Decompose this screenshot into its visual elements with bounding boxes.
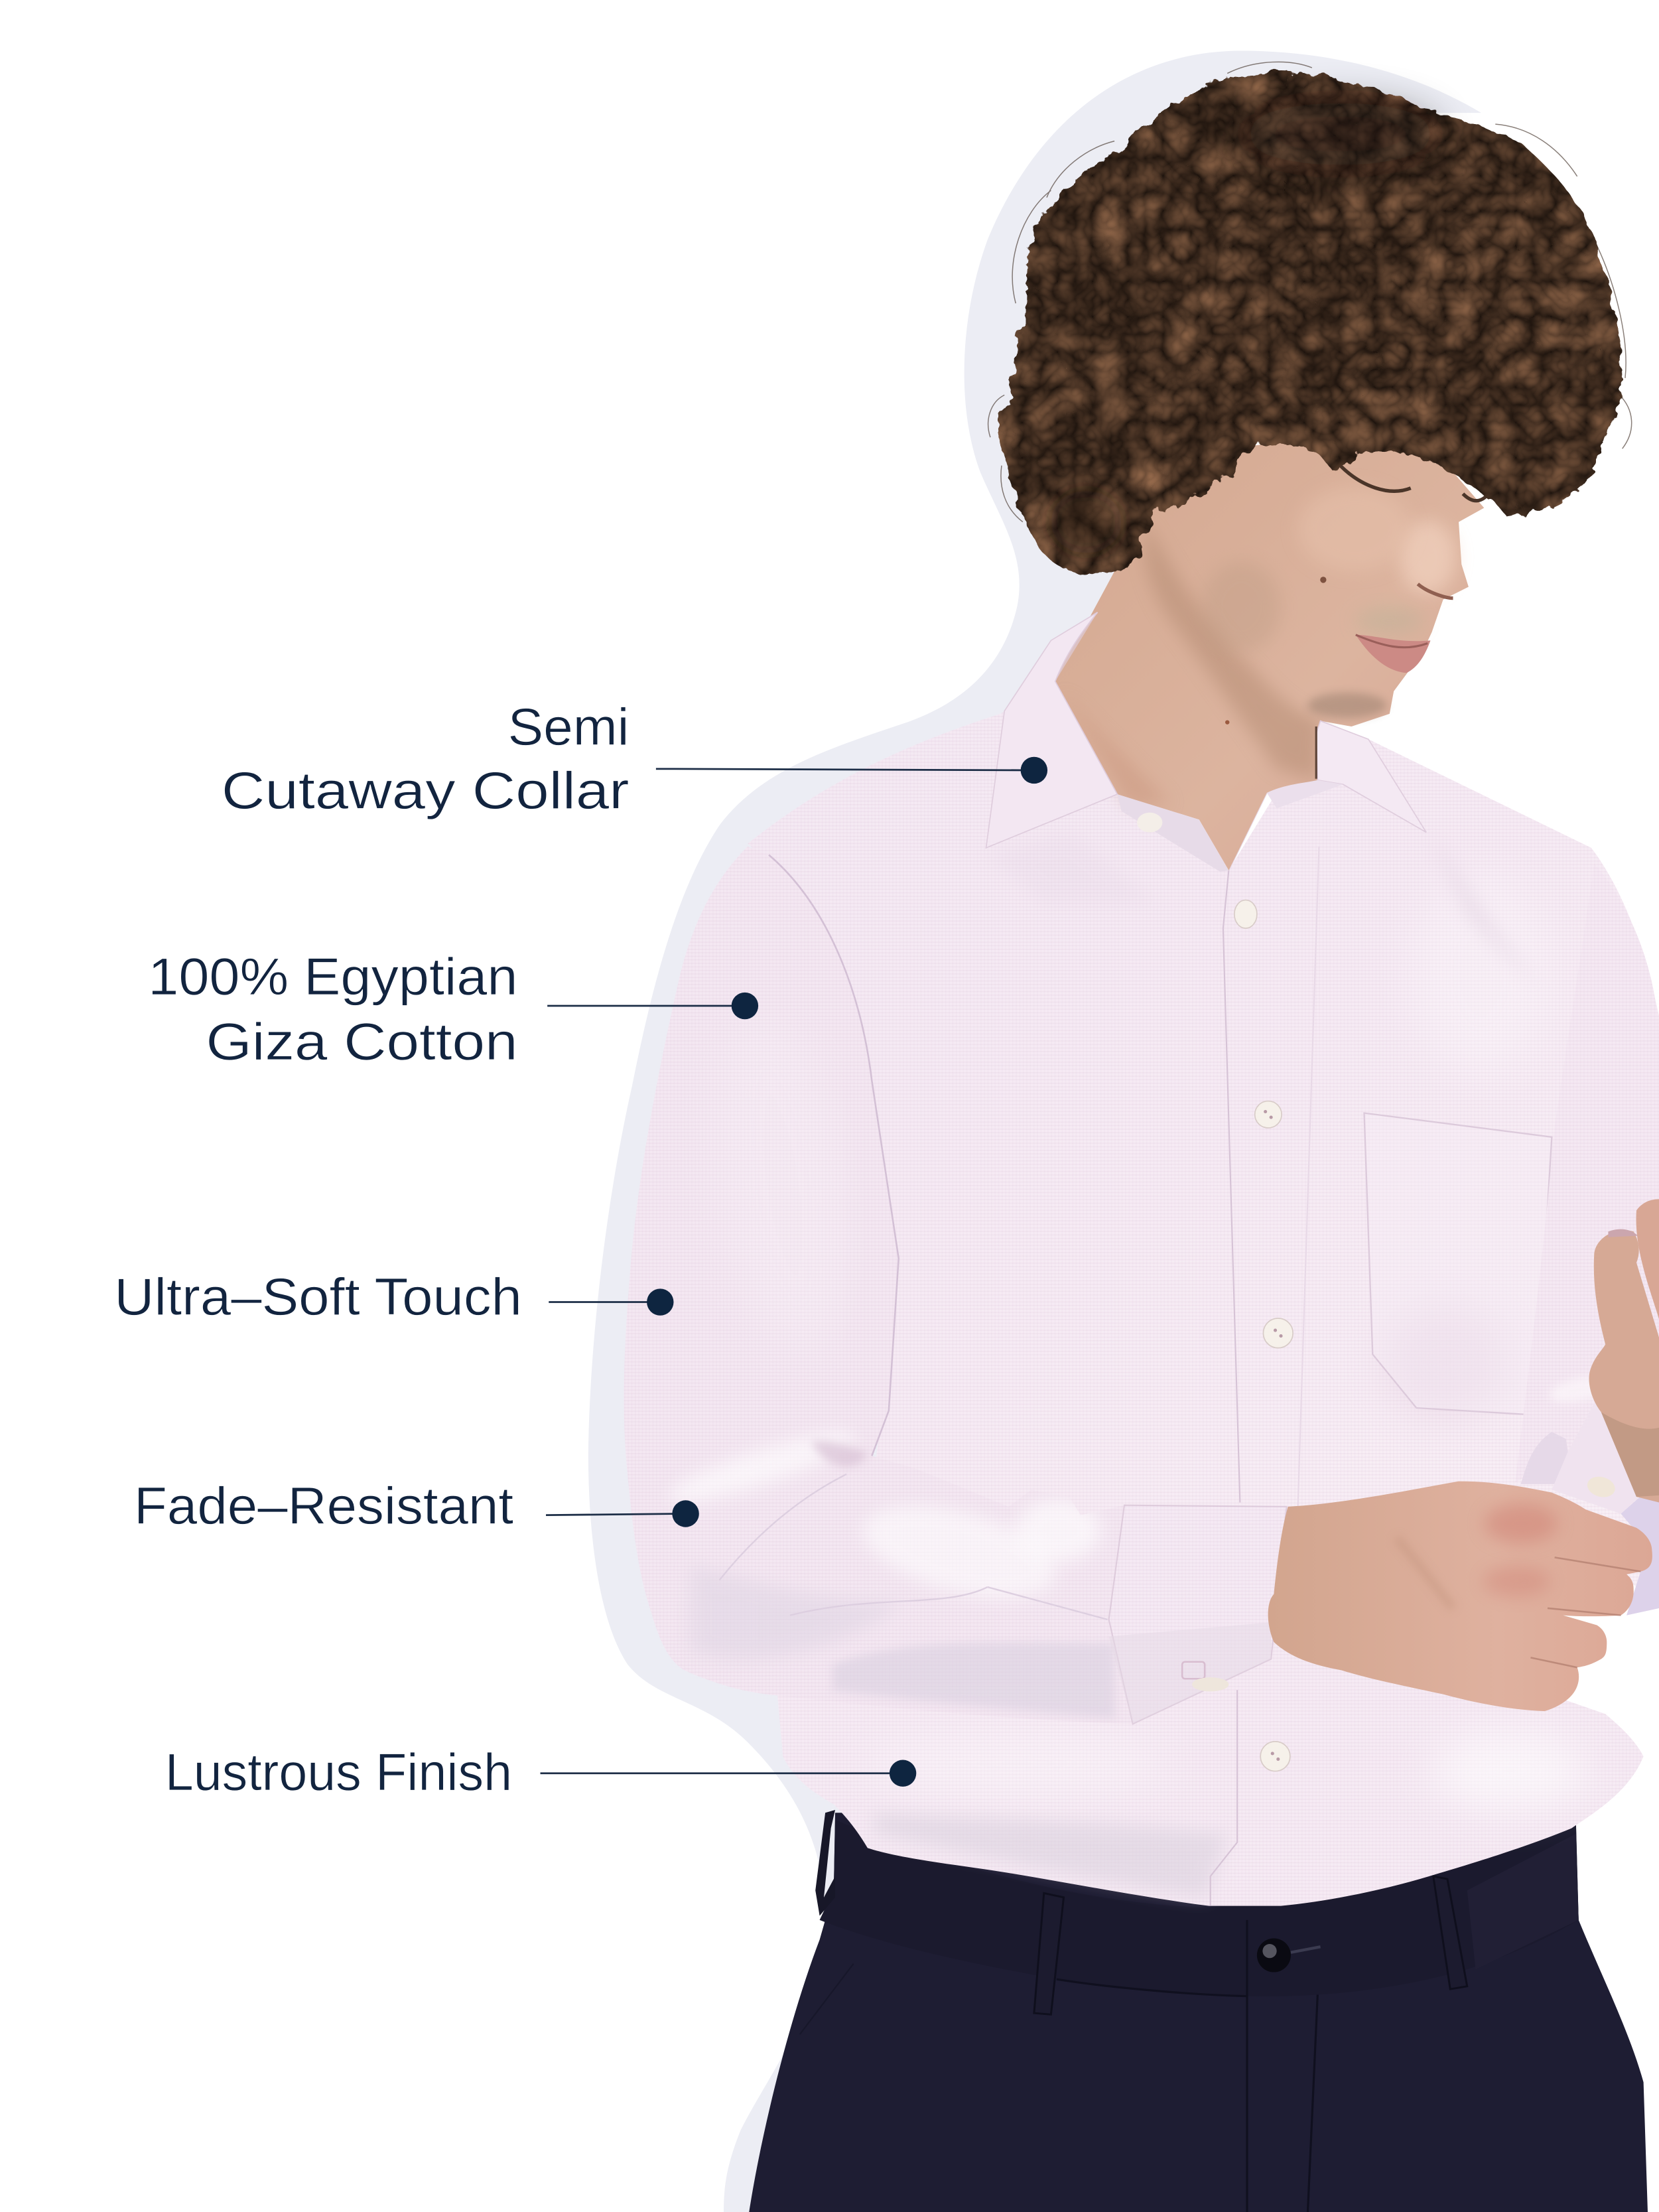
eyes: [1340, 466, 1411, 491]
side strap: [815, 1810, 835, 1915]
shirt body: [748, 681, 1659, 1906]
background silhouette: [588, 51, 1481, 2212]
callout: Lustrous Finish: Lustrous Finish: [165, 1743, 512, 1801]
far hand fingers: [1589, 1199, 1659, 1502]
near hand: [1268, 1482, 1652, 1711]
nose underside: [1418, 584, 1453, 598]
callout: Semi Cutaway Collar: Cutaway Collar: [222, 761, 630, 819]
cuff: [1109, 1505, 1287, 1724]
placket lines: [1211, 870, 1240, 1906]
ear: [1134, 454, 1185, 497]
armhole seam: [769, 855, 899, 1456]
callout: Lustrous Finish: [165, 1743, 916, 1801]
neck and face: [1055, 423, 1493, 870]
pocket: [1364, 1113, 1552, 1415]
waistband: [820, 1817, 1579, 1996]
hair shade: [1241, 103, 1439, 165]
shadows: [875, 1813, 1227, 1898]
shirt buttons: [1234, 900, 1293, 1771]
callout: Fade-Resistant: Fade–Resistant: [134, 1476, 513, 1535]
cuff: [1552, 1398, 1639, 1513]
soft highlights: [1411, 874, 1552, 1072]
belt loops: [1034, 1876, 1467, 2014]
trouser button: [1257, 1939, 1321, 1972]
shirt weave: [748, 681, 1659, 1906]
callout: Semi Cutaway Collar: Semi: [508, 698, 630, 756]
collar: [986, 612, 1426, 872]
callout: Fade-Resistant: [134, 1476, 699, 1535]
callout: 100% Egyptian Giza Cotton: [148, 947, 758, 1071]
left arm: [624, 847, 1287, 1724]
right sleeve: [1515, 863, 1659, 1616]
callout: Ultra-Soft Touch: Ultra–Soft Touch: [114, 1268, 522, 1326]
callout: 100% Egyptian Giza Cotton: Giza Cotton: [206, 1012, 517, 1071]
callout: 100% Egyptian Giza Cotton: 100% Egyptian: [148, 947, 517, 1006]
stubble: [1307, 693, 1387, 718]
trousers: [749, 1810, 1648, 2212]
callout: Ultra-Soft Touch: [114, 1268, 673, 1326]
callout: Semi Cutaway Collar: [222, 698, 1047, 819]
fly-away strands: [988, 62, 1632, 522]
arm folds and shading: [674, 1432, 1114, 1717]
hair: [988, 62, 1632, 573]
lips: [1356, 635, 1430, 673]
